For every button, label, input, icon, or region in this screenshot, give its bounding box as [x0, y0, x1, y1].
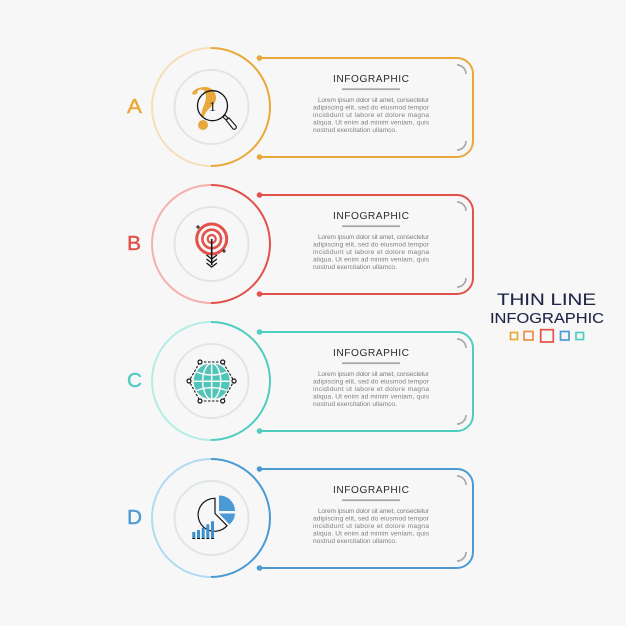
text block B: nostrud exercitation ullamco. — [313, 264, 397, 271]
heading B: INFOGRAPHIC — [333, 211, 409, 222]
text block B: incididunt ut labore et dolore magna — [313, 249, 429, 256]
panel: step A — [127, 48, 473, 166]
panel: step D — [127, 459, 473, 577]
letter C: C — [127, 370, 142, 392]
text block A: nostrud exercitation ullamco. — [313, 127, 397, 134]
inner ring B — [174, 207, 248, 281]
title: thin line infographic — [490, 290, 604, 327]
text block D: nostrud exercitation ullamco. — [313, 538, 397, 545]
title: thin line infographic: THIN LINE — [497, 290, 596, 309]
icon: target and arrow — [196, 224, 227, 267]
underline D — [342, 499, 400, 501]
panel: step C — [127, 322, 473, 440]
text block C: aliqua. Ut enim ad minim veniam, quis — [313, 393, 430, 400]
corner marks A — [457, 65, 466, 150]
text block D: incididunt ut labore et dolore magna — [313, 523, 429, 530]
underline B — [342, 225, 400, 227]
outer ring B — [152, 185, 270, 303]
text block C: incididunt ut labore et dolore magna — [313, 386, 429, 393]
letter A: A — [127, 96, 143, 118]
connector and frame B — [257, 192, 473, 297]
text block C: adipiscing elit, sed do eiusmod tempor — [313, 378, 430, 385]
icon: pie and bars — [192, 495, 235, 538]
connector and frame D — [257, 466, 473, 571]
connector and frame C — [257, 329, 473, 434]
text block B: Lorem ipsum dolor sit amet, consectetur — [318, 234, 430, 241]
icon: question and magnifier — [192, 87, 236, 130]
panel: step B — [127, 185, 473, 303]
connector and frame A — [257, 55, 473, 160]
text block A: aliqua. Ut enim ad minim veniam, quis — [313, 119, 430, 126]
underline A — [342, 88, 400, 90]
corner marks C — [457, 339, 466, 424]
text block A: adipiscing elit, sed do eiusmod tempor — [313, 104, 430, 111]
text block A — [313, 97, 430, 134]
heading C: INFOGRAPHIC — [333, 348, 409, 359]
text block D: Lorem ipsum dolor sit amet, consectetur — [318, 508, 430, 515]
text block D: aliqua. Ut enim ad minim veniam, quis — [313, 530, 430, 537]
corner marks D — [457, 476, 466, 561]
text block B: aliqua. Ut enim ad minim veniam, quis — [313, 256, 430, 263]
legend squares — [510, 330, 584, 342]
icon: question and magnifier: 1 — [209, 100, 216, 115]
icon: globe in hexagon — [187, 360, 236, 403]
text block C — [313, 371, 430, 408]
inner ring D — [174, 481, 248, 555]
outer ring A — [152, 48, 270, 166]
underline C — [342, 362, 400, 364]
outer ring D — [152, 459, 270, 577]
outer ring C — [152, 322, 270, 440]
title: thin line infographic: INFOGRAPHIC — [490, 310, 604, 327]
text block D — [313, 508, 430, 545]
text block D: adipiscing elit, sed do eiusmod tempor — [313, 515, 430, 522]
inner ring A — [174, 70, 248, 144]
text block B — [313, 234, 430, 271]
text block C: nostrud exercitation ullamco. — [313, 401, 397, 408]
letter B: B — [127, 233, 141, 255]
text block A: incididunt ut labore et dolore magna — [313, 112, 429, 119]
text block C: Lorem ipsum dolor sit amet, consectetur — [318, 371, 430, 378]
letter D: D — [127, 507, 142, 529]
corner marks B — [457, 202, 466, 287]
heading A: INFOGRAPHIC — [333, 74, 409, 85]
text block A: Lorem ipsum dolor sit amet, consectetur — [318, 97, 430, 104]
inner ring C — [174, 344, 248, 418]
heading D: INFOGRAPHIC — [333, 485, 409, 496]
text block B: adipiscing elit, sed do eiusmod tempor — [313, 241, 430, 248]
